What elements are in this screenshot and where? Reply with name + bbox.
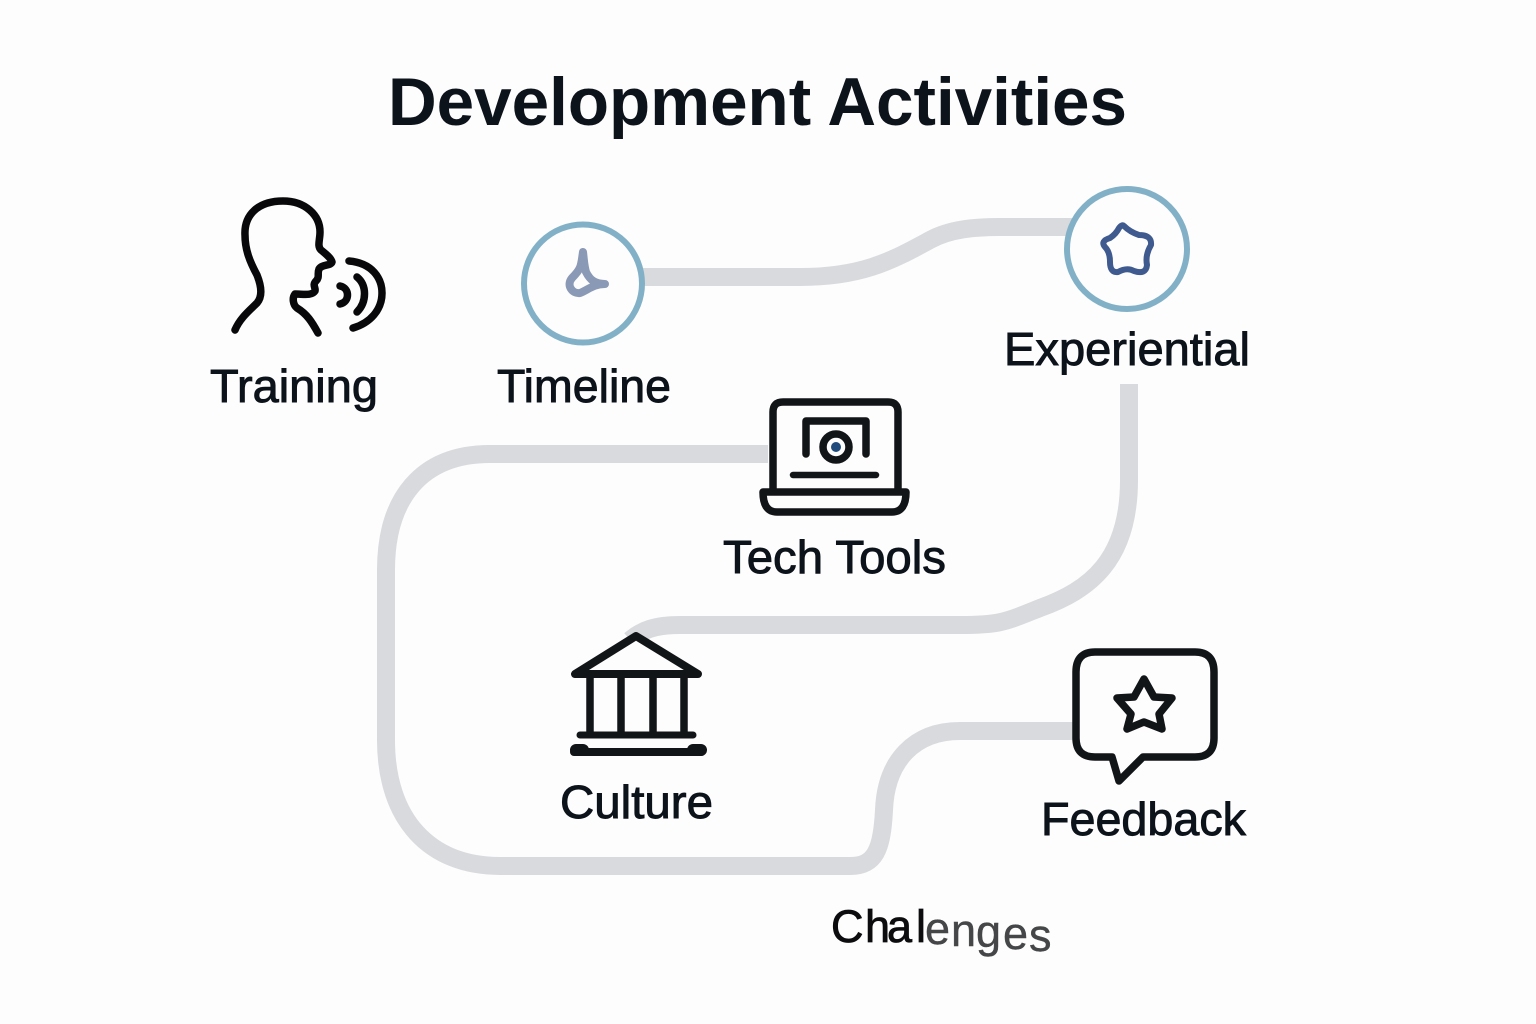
icon: temple [574, 636, 701, 752]
activity: feedback [1041, 652, 1247, 845]
label: training: Training [210, 360, 378, 412]
label: tech tools: Tech Tools [723, 531, 946, 583]
icon: laptop with camera [763, 402, 906, 512]
connector: tech tools to feedback [386, 454, 1074, 866]
activity: culture [560, 636, 713, 828]
label: experiential: Experiential [1004, 323, 1250, 375]
label: challenges: Chalenges [831, 901, 1052, 961]
activity: experiential [1004, 189, 1250, 375]
activity: tech tools [723, 402, 946, 583]
label: culture: Culture [560, 776, 713, 828]
label: timeline: Timeline [497, 360, 671, 412]
icon: clock ring [524, 224, 642, 342]
title: Development Activities [388, 64, 1127, 140]
activity: timeline [497, 224, 671, 412]
activity: training [210, 201, 382, 412]
connector: timeline to experiential [640, 227, 1072, 277]
icon: star ring [1067, 189, 1187, 309]
connector: experiential to culture [630, 384, 1129, 640]
icon: speech bubble with star [1076, 652, 1214, 781]
icon: speaking head [235, 201, 382, 333]
label: feedback: Feedback [1041, 793, 1247, 845]
